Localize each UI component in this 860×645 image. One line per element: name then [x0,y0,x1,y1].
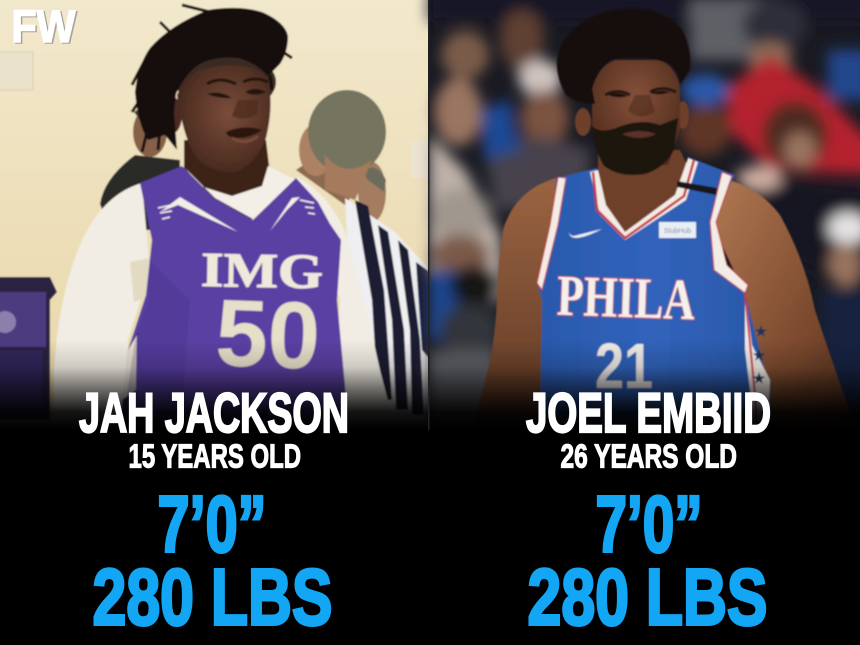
Embiid hair [557,8,690,104]
Embiid beard [592,118,678,175]
star on side panel lower: ★ [753,347,766,363]
jersey lettering PHILA: PHILA [556,263,696,332]
player white undershirt sleeves [54,176,398,440]
logo: FW: FW [12,1,76,52]
height: 7’0” [596,480,702,568]
logo: FW: FW [13,2,77,53]
panel: Jah Jackson photo [0,0,430,440]
stubhub patch: StubHub [664,228,691,235]
player hair [132,5,292,152]
player neck [184,140,272,222]
Embiid blue jersey [537,157,772,440]
player purple jersey [118,166,350,440]
jersey number 21: 21 [595,330,653,402]
bottom black fade [0,340,860,430]
trash bin [0,277,57,420]
nike swoosh [569,229,602,238]
background spectator [100,106,180,230]
age: 26 years old: 26 YEARS OLD [560,438,737,476]
notice on right wall [411,140,429,178]
player face [164,52,276,172]
black shoulder band [677,181,717,195]
Embiid face [575,60,689,165]
Embiid mouth [622,131,656,138]
panel: Joel Embiid photo [429,0,860,440]
Embiid left arm [470,178,556,440]
black lower background [0,429,860,645]
player undershirt collar [185,166,296,219]
jersey number 50: 50 [214,280,322,390]
Embiid neck [598,150,692,240]
Embiid right arm [710,176,860,440]
notice on wall [0,52,33,90]
star on side panel bottom: ★ [753,370,766,386]
star on side panel: ★ [755,323,768,339]
blurred arena crowd [429,0,860,430]
height: 7’0” [158,480,266,568]
jersey arm trim [537,177,566,290]
referee [296,90,430,425]
name: Jah Jackson: JAH JACKSON [79,381,349,444]
right player stats [526,381,771,642]
Embiid figure [470,8,860,440]
left player stats [79,381,349,642]
age: 15 years old: 15 YEARS OLD [128,438,301,476]
weight: 280 LBS [92,552,332,642]
jersey neck trim [590,158,698,240]
panel seam [428,0,430,430]
jersey lettering IMG: IMG [201,242,323,299]
weight: 280 LBS [528,552,768,642]
stubhub patch [659,222,696,238]
